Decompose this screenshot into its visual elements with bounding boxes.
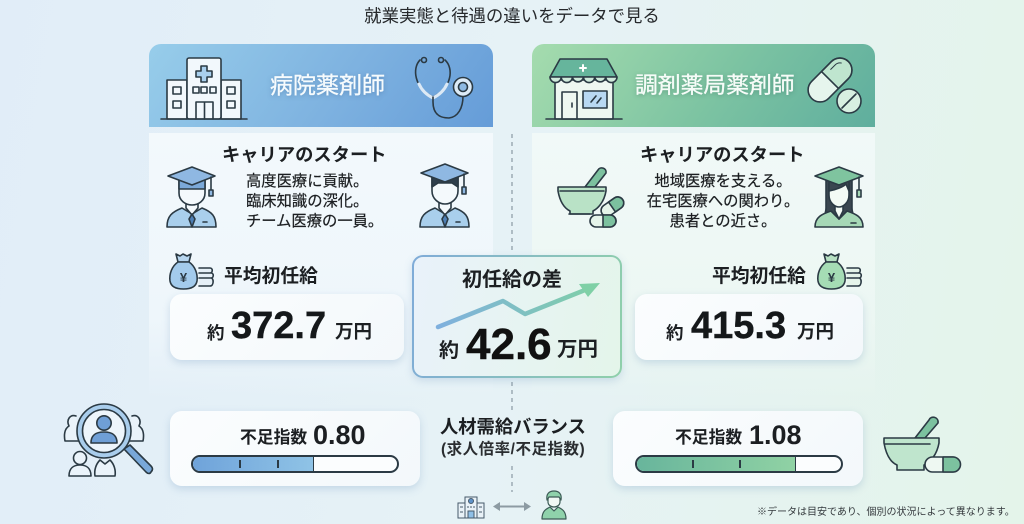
icon: money bag hospital: ¥ xyxy=(180,270,188,285)
heading: salary difference: 初任給の差 xyxy=(462,269,562,291)
value: 42.6: 万円 xyxy=(557,338,598,361)
text: pharmacy career description: 地域医療を支える。 xyxy=(654,173,792,190)
icon: money bag pharmacy: ¥ xyxy=(828,270,836,285)
card: pharmacy shortage index xyxy=(613,411,863,486)
heading: pharmacy average starting salary: 平均初任給 xyxy=(712,265,806,286)
value: 372.7: 372.7 xyxy=(231,305,326,347)
label and value: 1.08: 1.08 xyxy=(749,420,802,450)
value: 415.3 xyxy=(666,305,834,347)
heading: hospital average starting salary: 平均初任給 xyxy=(224,265,318,286)
text: hospital career description: 臨床知識の深化。 xyxy=(246,193,368,210)
heading: pharmacy pharmacist: 調剤薬局薬剤師 xyxy=(635,72,795,98)
card: hospital salary xyxy=(170,294,404,360)
value: 415.3: 415.3 xyxy=(691,305,786,347)
panel: pharmacy pharmacist background xyxy=(532,133,875,398)
text: pharmacy career description xyxy=(647,172,799,230)
card: pharmacy salary xyxy=(635,294,863,360)
footnote: ※データは目安であり、個別の状況によって異なります。 xyxy=(757,507,1015,518)
value: 42.6: 約 xyxy=(439,340,459,362)
label and value: 1.08 xyxy=(675,420,802,450)
value: 372.7 xyxy=(207,305,372,347)
value: 42.6: 42.6 xyxy=(466,320,552,369)
heading: pharmacy career start: キャリアのスタート xyxy=(640,144,805,165)
panel: hospital pharmacist background xyxy=(149,133,493,398)
text: pharmacy career description: 在宅医療への関わり。 xyxy=(647,193,799,210)
label and value: 0.80: 不足指数 xyxy=(240,428,307,447)
heading: hospital pharmacist: 病院薬剤師 xyxy=(270,72,385,98)
value: 372.7: 約 xyxy=(207,323,224,343)
value: 42.6 xyxy=(439,320,598,369)
bar: 0.80 xyxy=(191,455,399,473)
value: 415.3: 万円 xyxy=(797,321,834,342)
text: hospital career description: 高度医療に貢献。 xyxy=(246,173,368,190)
bar: 1.08 xyxy=(635,455,843,473)
title: 就業実態と待遇の違いをデータで見る xyxy=(364,6,660,26)
value: 372.7: 万円 xyxy=(335,321,372,342)
text: hospital career description xyxy=(246,172,383,230)
label and value: 0.80: 0.80 xyxy=(313,420,366,450)
card: hospital shortage index xyxy=(170,411,420,486)
label and value: 0.80 xyxy=(240,420,366,450)
text: pharmacy career description: 患者との近さ。 xyxy=(670,213,776,230)
heading: supply and demand balance: 人材需給バランス xyxy=(440,416,586,437)
header: pharmacy pharmacist xyxy=(532,44,875,127)
callout: starting salary difference xyxy=(412,255,622,378)
header: hospital pharmacist xyxy=(149,44,493,127)
text: job ratio subtitle: (求人倍率/不足指数) xyxy=(441,441,585,458)
label and value: 1.08: 不足指数 xyxy=(675,428,742,447)
value: 415.3: 約 xyxy=(666,323,684,343)
heading: hospital career start: キャリアのスタート xyxy=(222,144,387,165)
text: hospital career description: チーム医療の一員。 xyxy=(246,213,383,230)
callout inner xyxy=(414,257,620,376)
